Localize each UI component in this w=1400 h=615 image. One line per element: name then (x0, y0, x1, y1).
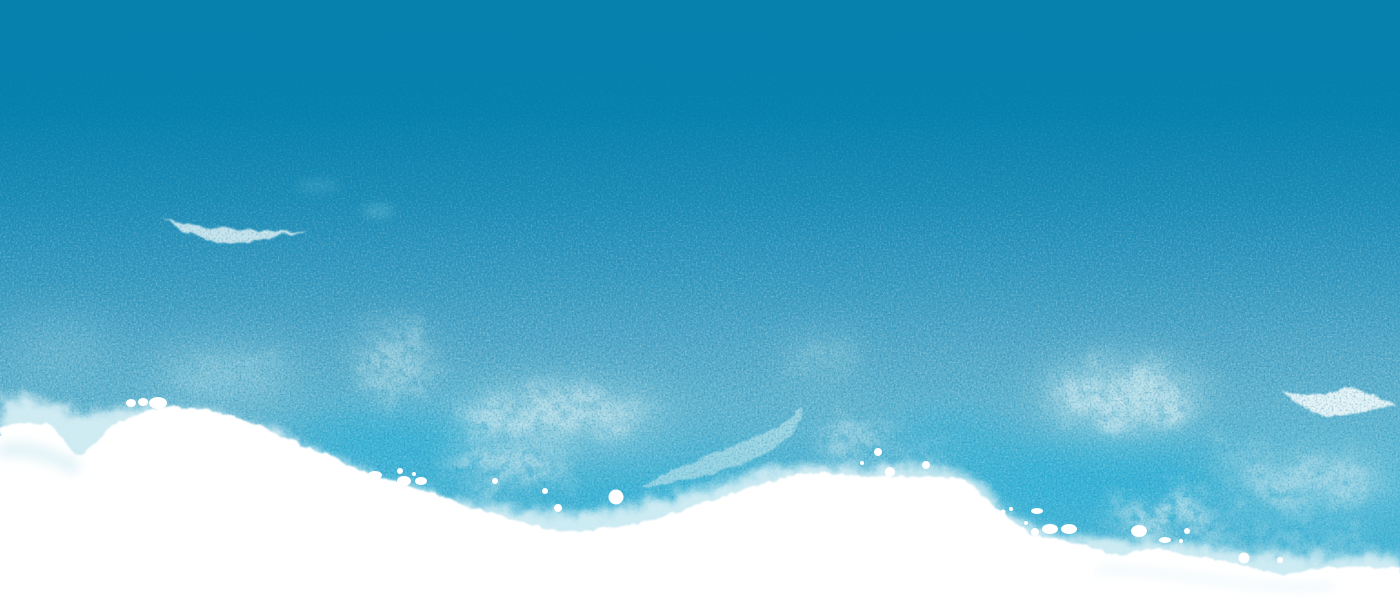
foam bubbles (126, 397, 1283, 564)
shoreline: outer translucent foam (0, 396, 1400, 615)
deep turquoise patches in shallow water (290, 415, 1390, 543)
foam streak: upper right (1283, 387, 1397, 416)
soft haze of foam under water (5, 330, 1400, 506)
grain texture (0, 93, 1400, 562)
mottled watercolor clouds (165, 330, 1390, 553)
shoreline: white foam line and shore body (0, 407, 1400, 615)
foam streak: centre wave (642, 404, 802, 488)
shoreline: solid white backing at the frame edge (0, 436, 1400, 615)
shoreline: pale wash beneath the foam line (6, 450, 1330, 587)
foam streak: upper left (163, 180, 394, 243)
